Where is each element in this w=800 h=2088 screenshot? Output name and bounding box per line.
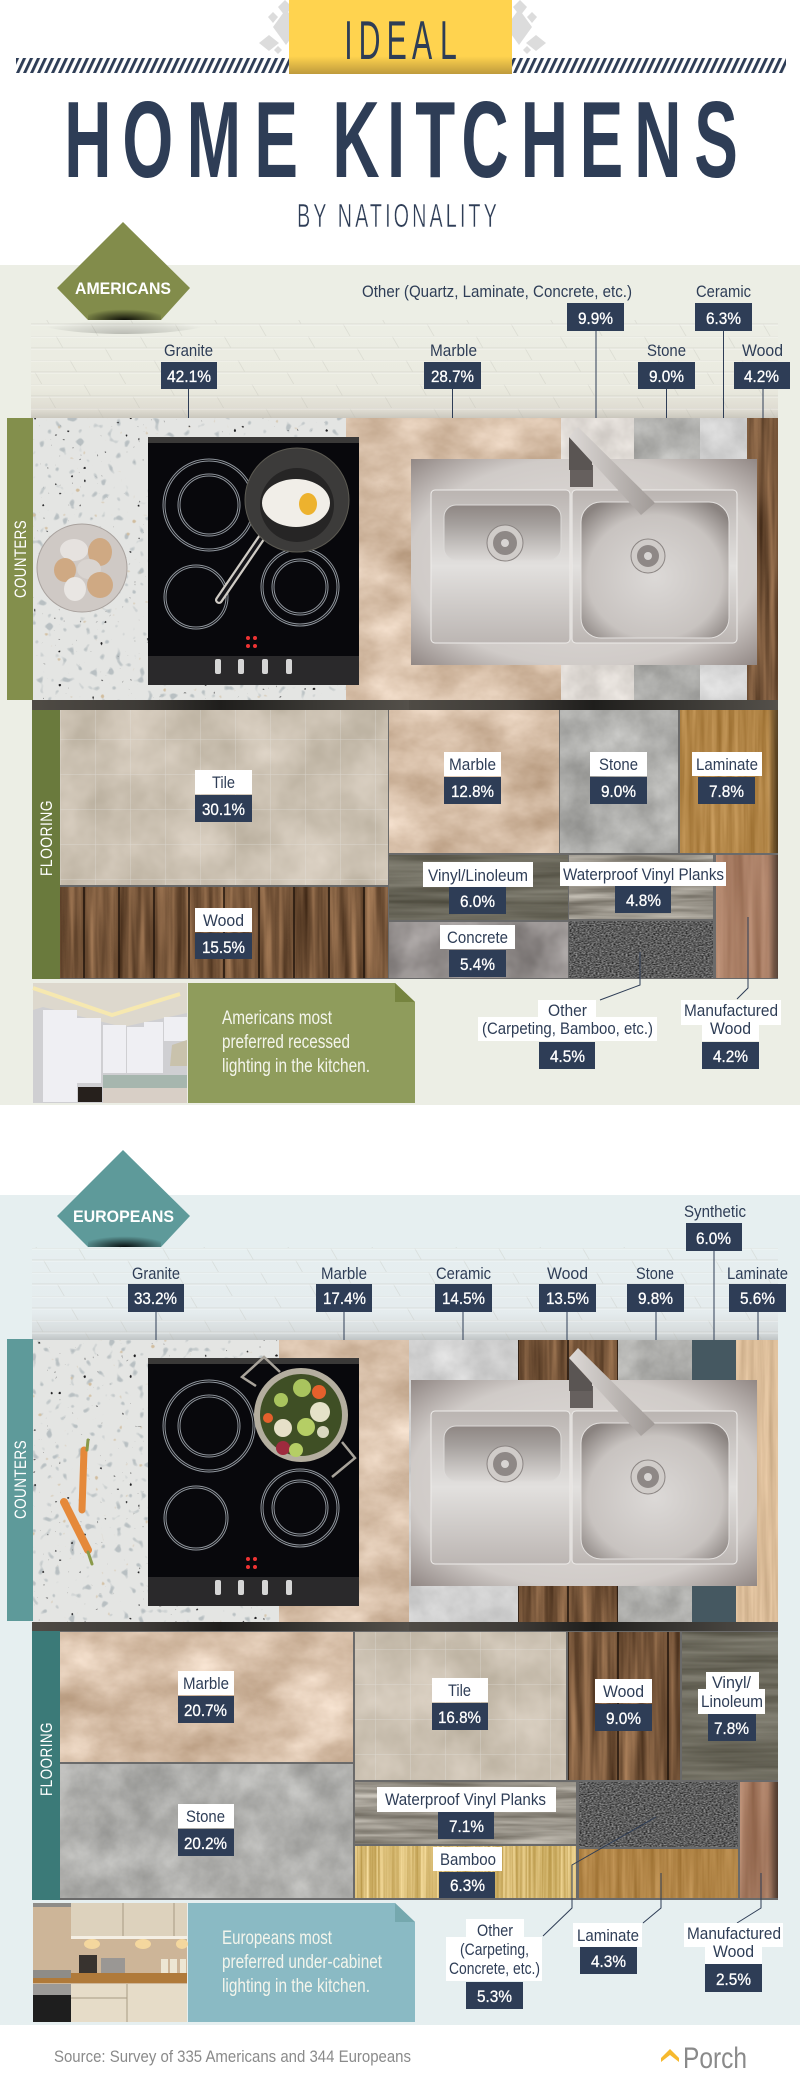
label: counters Other 9.9% (362, 282, 632, 418)
label: floor Tile 16.8%: 16.8% (438, 1708, 481, 1727)
badge: Americans: AMERICANS (75, 279, 171, 298)
sidebar: counters: COUNTERS (11, 520, 30, 598)
badge: Europeans (57, 1150, 190, 1247)
icon: egg bowl (37, 524, 127, 612)
label: floor Manufactured Wood 4.2%: Wood (710, 1019, 751, 1038)
label: counters Marble 28.7% (424, 341, 481, 418)
label: floor Bamboo 6.3%: Bamboo (440, 1850, 496, 1869)
floor: laminate (680, 710, 778, 853)
section background (0, 1195, 800, 2025)
label: floor Vinyl/Linoleum 6.0% (423, 862, 533, 914)
label: floor Concrete 5.4%: 5.4% (460, 955, 495, 974)
label: counters Granite 42.1% (161, 341, 217, 418)
label: floor Wood 15.5%: 15.5% (202, 938, 245, 957)
flooring treemap (32, 1631, 778, 1900)
label: counters Wood 13.5%: Wood (547, 1264, 588, 1283)
label: floor Vinyl/Linoleum 7.8% (698, 1672, 765, 1741)
label: counters Stone 9.8% (627, 1264, 684, 1340)
counter segment: wood (747, 418, 778, 700)
callout: lighting: Americans most (222, 1008, 333, 1029)
callout: lighting (188, 1903, 415, 2022)
label: floor Manufactured Wood 2.5% (684, 1873, 783, 1992)
callout: lighting: preferred recessed (222, 1032, 350, 1053)
floor: wood (568, 1632, 680, 1780)
sidebar: flooring: FLOORING (37, 800, 56, 876)
icon: cooktop (148, 1358, 359, 1606)
counter segment: granite (33, 1340, 279, 1622)
label: counters Ceramic 6.3%: 6.3% (706, 309, 741, 328)
label: counters Laminate 5.6%: Laminate (727, 1264, 788, 1283)
sidebar: flooring: FLOORING (37, 1722, 56, 1796)
label: counters Ceramic 6.3%: Ceramic (696, 282, 751, 301)
label: counters Granite 42.1%: Granite (164, 341, 213, 360)
label: floor Manufactured Wood 2.5%: Manufactured (687, 1924, 781, 1943)
label: floor Laminate 4.3%: Laminate (577, 1926, 639, 1945)
shelf edge (32, 1622, 778, 1631)
label: floor Tile 16.8% (432, 1678, 488, 1730)
label: floor Marble 12.8%: 12.8% (451, 782, 494, 801)
callout: lighting: preferred under-cabinet (222, 1952, 383, 1973)
icon: frying pan with egg (219, 448, 349, 600)
label: counters Stone 9.0%: 9.0% (649, 367, 684, 386)
counter segment: synthetic (692, 1340, 736, 1622)
sidebar: flooring (32, 710, 60, 979)
floor: wood (60, 887, 388, 978)
badge: Americans (34, 222, 214, 334)
label: floor Other 5.3%: Concrete, etc.) (449, 1959, 540, 1978)
label: counters Marble 17.4% (316, 1264, 372, 1340)
counter segment: stone (634, 418, 700, 700)
icon: cooktop (148, 437, 359, 685)
label: floor Waterproof Vinyl Planks 7.1%: 7.1% (449, 1817, 484, 1836)
label: floor Other 5.3% (446, 1817, 656, 2009)
label: counters Ceramic 14.5% (435, 1264, 492, 1340)
label: floor Other 4.5%: Other (548, 1001, 587, 1020)
floor: concrete (389, 922, 568, 978)
header banner graphic (16, 0, 786, 74)
label: floor Other 4.5%: 4.5% (550, 1047, 585, 1066)
label: floor Tile 30.1% (195, 770, 252, 822)
label: floor Stone 20.2%: Stone (186, 1807, 225, 1826)
label: counters Synthetic 6.0%: 6.0% (696, 1229, 731, 1248)
label: counters Synthetic 6.0% (684, 1202, 746, 1340)
label: floor Wood 9.0%: 9.0% (606, 1709, 641, 1728)
label: counters Wood 4.2% (734, 341, 790, 418)
label: counters Synthetic 6.0%: Synthetic (684, 1202, 746, 1221)
label: floor Vinyl/Linoleum 6.0%: 6.0% (460, 892, 495, 911)
label: counters Wood 4.2%: 4.2% (744, 367, 779, 386)
label: counters Granite 33.2% (128, 1264, 184, 1340)
label: counters Marble 17.4%: 17.4% (323, 1289, 366, 1308)
counters strip (7, 1339, 778, 1622)
sidebar: counters (7, 1339, 33, 1621)
logo: Porch: Porch (683, 2042, 747, 2075)
label: floor Marble 20.7%: Marble (183, 1674, 229, 1693)
counter segment: wood (518, 1340, 618, 1622)
label: counters Marble 28.7%: Marble (430, 341, 477, 360)
label: floor Wood 9.0%: Wood (603, 1682, 644, 1701)
label: counters Ceramic 14.5%: Ceramic (436, 1264, 491, 1283)
tile wall (32, 1247, 778, 1340)
label: floor Tile 16.8%: Tile (448, 1681, 471, 1700)
floor: stone (60, 1764, 353, 1898)
callout: lighting: Europeans most (222, 1928, 333, 1949)
sidebar: counters (7, 418, 33, 700)
shelf edge (32, 700, 778, 710)
counter segment: laminate (736, 1340, 778, 1622)
floor: carpet (569, 921, 713, 978)
label: floor Marble 12.8%: Marble (449, 755, 496, 774)
sidebar: flooring (32, 1631, 60, 1900)
label: floor Waterproof Vinyl Planks 4.8%: 4.8% (626, 891, 661, 910)
striped rule (16, 58, 786, 73)
label: counters Granite 33.2%: Granite (132, 1264, 180, 1283)
counter segment: marble (279, 1340, 409, 1622)
floor: laminate (579, 1849, 738, 1898)
subtitle: BY NATIONALITY: BY NATIONALITY (297, 197, 497, 234)
label: counters Other 9.9%: Other (Quartz, Laminate, Concrete, etc.) (362, 282, 632, 301)
label: floor Stone 9.0%: Stone (599, 755, 638, 774)
label: floor Other 4.5%: (Carpeting, Bamboo, etc.) (482, 1019, 653, 1038)
icon: pot of vegetables (242, 1357, 355, 1477)
label: floor Marble 12.8% (444, 752, 501, 804)
flooring treemap (32, 710, 778, 979)
label: counters Granite 33.2%: 33.2% (134, 1289, 177, 1308)
label: floor Wood 9.0% (595, 1679, 652, 1731)
label: floor Tile 30.1%: Tile (212, 773, 235, 792)
label: counters Marble 17.4%: Marble (321, 1264, 367, 1283)
label: floor Other 5.3%: 5.3% (477, 1987, 512, 2006)
label: floor Concrete 5.4%: Concrete (447, 928, 508, 947)
icon: sink (411, 427, 757, 665)
floor: waterproof planks (569, 855, 713, 919)
counter segment: marble (346, 418, 561, 700)
floor: carpet (579, 1782, 738, 1847)
label: floor Tile 30.1%: 30.1% (202, 800, 245, 819)
label: counters Laminate 5.6%: 5.6% (740, 1289, 775, 1308)
label: counters Stone 9.8%: Stone (636, 1264, 674, 1283)
counter segment: ceramic (700, 418, 747, 700)
label: floor Bamboo 6.3%: 6.3% (450, 1876, 485, 1895)
counter segment: granite (33, 418, 346, 700)
counter segment: ceramic (409, 1340, 518, 1622)
icon: sink (411, 1348, 757, 1586)
label: floor Bamboo 6.3% (433, 1847, 502, 1898)
label: floor Manufactured Wood 4.2%: Manufactured (684, 1001, 778, 1020)
label: floor Other 4.5% (478, 952, 657, 1069)
label: floor Marble 20.7%: 20.7% (184, 1701, 227, 1720)
counters strip (7, 418, 778, 700)
label: floor Marble 20.7% (178, 1671, 234, 1723)
counter segment: other (561, 418, 634, 700)
source note: Source: Survey of 335 Americans and 344 Europeans (54, 2047, 411, 2066)
label: counters Laminate 5.6% (727, 1264, 788, 1340)
icon: grey diamonds left of banner (259, 0, 299, 54)
label: counters Stone 9.0%: Stone (647, 341, 686, 360)
label: floor Wood 15.5%: Wood (203, 911, 244, 930)
label: counters Marble 28.7%: 28.7% (431, 367, 474, 386)
label: counters Stone 9.0% (638, 341, 695, 418)
panel: Americans section (0, 222, 800, 1105)
label: floor Manufactured Wood 2.5%: 2.5% (716, 1970, 751, 1989)
floor: marble (389, 710, 559, 853)
label: floor Other 5.3%: Other (477, 1921, 513, 1940)
icon: grey diamonds right of banner (506, 0, 546, 54)
floor: manufactured wood (716, 855, 778, 978)
title: IDEAL: IDEAL (344, 11, 457, 71)
callout: lighting: lighting in the kitchen. (222, 1976, 370, 1997)
label: floor Wood 15.5% (195, 908, 252, 959)
counter segment: stone (618, 1340, 692, 1622)
label: floor Stone 20.2% (178, 1804, 234, 1856)
label: counters Granite 42.1%: 42.1% (167, 367, 211, 386)
sidebar: counters: COUNTERS (11, 1440, 30, 1519)
section background (0, 265, 800, 1105)
floor: marble (60, 1632, 353, 1762)
label: floor Laminate 7.8%: Laminate (696, 755, 758, 774)
floor: vinyl (682, 1632, 778, 1780)
label: floor Waterproof Vinyl Planks 4.8% (560, 862, 726, 913)
badge: Europeans: EUROPEANS (73, 1207, 174, 1226)
yellow banner (289, 0, 512, 74)
label: floor Laminate 7.8% (692, 752, 762, 804)
label: counters Wood 4.2%: Wood (742, 341, 783, 360)
photo: under-cabinet lighting kitchen (33, 1903, 188, 2022)
floor: waterproof planks (355, 1782, 576, 1844)
label: floor Laminate 4.3% (573, 1873, 661, 1974)
callout: lighting (188, 983, 415, 1103)
label: floor Stone 20.2%: 20.2% (184, 1834, 227, 1853)
label: counters Wood 13.5% (539, 1264, 596, 1340)
icon: carrots (64, 1440, 92, 1564)
label: floor Waterproof Vinyl Planks 7.1%: Waterproof Vinyl Planks (385, 1790, 546, 1809)
floor: manufactured wood (740, 1782, 778, 1898)
label: floor Waterproof Vinyl Planks 4.8%: Waterproof Vinyl Planks (563, 865, 724, 884)
floor: tile (355, 1632, 566, 1780)
floor: stone (560, 710, 678, 853)
floor: vinyl (389, 855, 568, 920)
label: counters Stone 9.8%: 9.8% (638, 1289, 673, 1308)
label: floor Laminate 7.8%: 7.8% (709, 782, 744, 801)
label: floor Stone 9.0%: 9.0% (601, 782, 636, 801)
callout: lighting: lighting in the kitchen. (222, 1056, 370, 1077)
label: floor Waterproof Vinyl Planks 7.1% (377, 1787, 556, 1839)
label: floor Vinyl/Linoleum 7.8%: Vinyl/ (712, 1673, 751, 1692)
label: floor Vinyl/Linoleum 7.8%: Linoleum (701, 1692, 763, 1711)
floor: bamboo (355, 1846, 576, 1898)
logo: Porch (661, 2042, 747, 2075)
label: floor Manufactured Wood 4.2%: 4.2% (713, 1047, 748, 1066)
panel: Europeans section (0, 1150, 800, 2025)
label: counters Ceramic 14.5%: 14.5% (442, 1289, 485, 1308)
floor: tile (60, 710, 388, 885)
label: floor Concrete 5.4% (440, 925, 515, 977)
label: counters Other 9.9%: 9.9% (578, 309, 613, 328)
label: counters Ceramic 6.3% (695, 282, 752, 418)
label: floor Manufactured Wood 4.2% (681, 917, 781, 1069)
label: counters Wood 13.5%: 13.5% (546, 1289, 589, 1308)
label: floor Vinyl/Linoleum 7.8%: 7.8% (714, 1719, 749, 1738)
photo: recessed lighting kitchen (33, 983, 187, 1103)
tile wall (31, 320, 778, 418)
label: floor Stone 9.0% (590, 752, 647, 804)
label: floor Vinyl/Linoleum 6.0%: Vinyl/Linoleum (428, 866, 528, 885)
label: floor Laminate 4.3%: 4.3% (591, 1952, 626, 1971)
label: floor Manufactured Wood 2.5%: Wood (713, 1942, 754, 1961)
title: HOME KITCHENS: HOME KITCHENS (64, 80, 738, 201)
label: floor Other 5.3%: (Carpeting, (460, 1940, 529, 1959)
